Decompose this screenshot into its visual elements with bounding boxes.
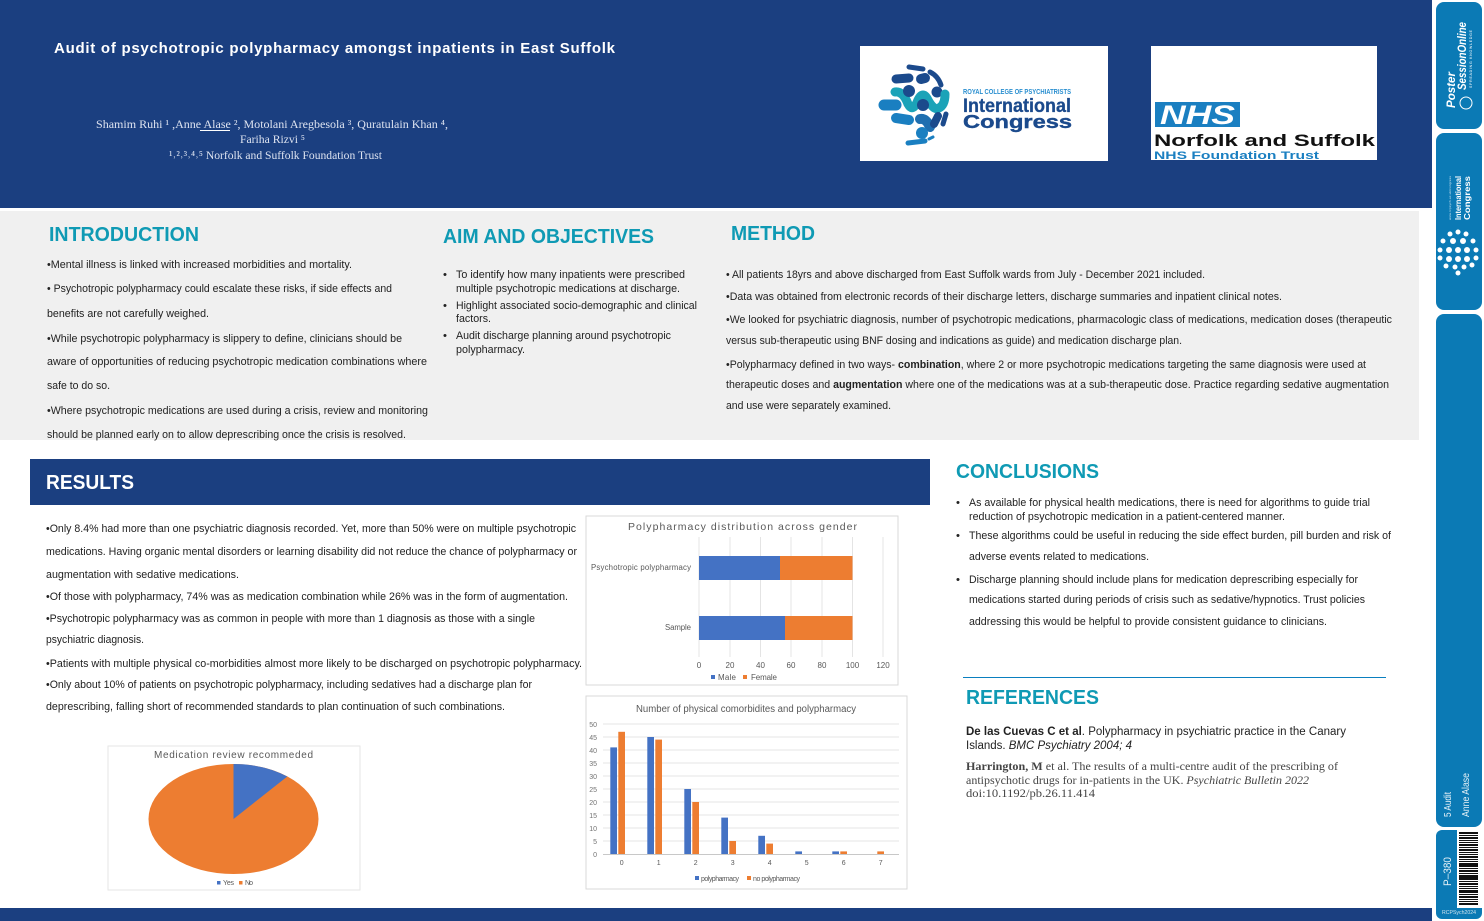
text: objectives: multiple psychotropic medications at discharge. [456,283,680,295]
reference 2: Harrington, M et al. The results of a multi-centre audit of the prescribing of [966,761,1338,773]
text: results: medications. Having organic mental disorders or learning disability did not reduce the chance of polypharmacy or [46,546,577,558]
legend: Male [718,673,737,682]
logo text: Congress [963,111,1072,132]
category labels: Sample [665,623,691,632]
chart title: Number of physical comorbidites and polypharmacy [636,704,856,715]
authors [96,119,448,162]
legend [711,673,778,682]
logo: NHS Norfolk and Suffolk [1151,46,1377,162]
text: method: versus sub-therapeutic using BNF dosing and indications as guide) and medication discharge plan. [726,335,1182,347]
x axis labels: 0 [620,860,624,867]
category labels: Psychotropic polypharmacy [591,563,691,572]
text: conclusions: Discharge planning should include plans for medication deprescribing especially for [969,574,1358,586]
legend: polypharmacy [701,876,740,883]
trust name: Norfolk and Suffolk [1154,131,1376,150]
text: results: psychiatric diagnosis. [46,634,144,646]
legend: No [245,880,253,887]
axis ticks: 100 [846,661,860,670]
axis ticks: 60 [787,661,796,670]
text: introduction: •Where psychotropic medications are used during a crisis, review and monitoring [47,405,428,417]
authors: Shamim Ruhi ¹ ,Anne Alase ², Motolani Aregbesola ³, Quratulain Khan ⁴, [96,119,448,131]
panel: method [726,223,1392,412]
x axis labels: 1 [657,860,661,867]
y axis labels: 45 [589,735,597,742]
text: method: and use were separately examined. [726,400,891,412]
bar: psychotropic polypharmacy [699,556,852,580]
text: method: therapeutic doses and augmentation where one of the medications was at a sub-therapeutic dose. Practice regarding sedative augmentation [726,379,1389,391]
logo text: ROYAL COLLEGE OF PSYCHIATRISTS [963,87,1071,96]
axis ticks: 20 [726,661,735,670]
reference 1: De las Cuevas C et al. Polypharmacy in psychiatric practice in the Canary [966,726,1346,738]
heading bar: results: RESULTS [46,472,134,494]
text: objectives: Audit discharge planning around psychotropic [456,330,671,342]
tab: Poster Session Online: Poster [1444,71,1458,108]
text: objectives: factors. [456,313,491,325]
text: objectives: Highlight associated socio-demographic and clinical [456,300,697,312]
x axis labels: 3 [731,860,735,867]
panel: grey upper section [0,211,1419,441]
text: conclusions: • [956,574,960,586]
text: conclusions: reduction of psychotropic medication in a patient-centered manner. [969,511,1285,523]
text: objectives [443,269,697,356]
heading: references: REFERENCES [966,687,1099,709]
tab: Poster Session Online [1436,2,1482,129]
text: results: •Only 8.4% had more than one psychiatric diagnosis recorded. Yet, more than 50% were on multiple psychotropic [46,523,576,535]
reference 2 [966,761,1338,800]
y axis labels: 15 [589,813,597,820]
chart title: Medication review recommeded [154,750,313,761]
text: conclusions: • [956,530,960,542]
y axis labels: 10 [589,826,597,833]
text: conclusions [956,497,1392,628]
y axis labels: 30 [589,774,597,781]
axis ticks: 0 [697,661,702,670]
y axis labels [589,722,597,859]
tab: poster number and barcode [1436,830,1482,919]
text: results: deprescribing, falling short of recommended standards to plan continuation of such combinations. [46,701,505,713]
NHS lozenge: NHS [1160,100,1235,130]
tab: poster category and author: 5 Audit [1442,792,1454,817]
text: method: • All patients 18yrs and above discharged from East Suffolk wards from July - December 2021 included. [726,269,1205,281]
text: introduction: •Mental illness is linked with increased morbidities and mortality. [47,259,352,271]
tab: poster number and barcode: P–380 [1442,857,1454,886]
text: results: •Patients with multiple physical co-morbidities almost more likely to be discharged on psychotropic polypharmacy. [46,658,582,670]
bar: sample [699,616,852,640]
legend [217,880,253,887]
text: introduction: benefits are not carefully weighed. [47,308,209,320]
logo text [963,87,1072,132]
text: conclusions: addressing this would be helpful to provide consistent guidance to clinicians. [969,616,1327,628]
bars: no polypharmacy [618,732,884,854]
tab: Poster Session Online: SPREADING KNOWLEDGE [1469,29,1473,88]
x axis labels: 7 [879,860,883,867]
y axis labels: 0 [593,852,597,859]
sidebar [1436,2,1482,919]
chart: physical comorbidities and polypharmacy [586,696,907,889]
icon: dotted globe [1438,230,1478,276]
barcode [1457,830,1482,908]
y axis labels: 5 [593,839,597,846]
text: method: •We looked for psychiatric diagnosis, number of psychotropic medications, pharmacologic class of medications, medication doses (therapeutic [726,314,1392,326]
authors: Fariha Rizvi ⁵ [240,134,305,146]
chart title: Polypharmacy distribution across gender [628,521,858,533]
tab: poster category and author [1436,314,1482,827]
reference 2: antipsychotic drugs for in-patients in the UK. Psychiatric Bulletin 2022 [966,775,1309,787]
category labels [591,563,691,632]
y axis labels: 25 [589,787,597,794]
NHS lozenge [1155,100,1240,130]
text: method: •Polypharmacy defined in two ways- combination, where 2 or more psychotropic medications targeting the same diagnosis were used at [726,359,1367,371]
logo: RCPsych International Congress [860,46,1108,161]
text: objectives: polypharmacy. [456,344,525,356]
legend: Yes [223,880,234,887]
text: method: •Data was obtained from electronic records of their discharge letters, discharge summaries and inpatient clinical notes. [726,291,1282,303]
authors: ¹˒²˒³˒⁴˒⁵ Norfolk and Suffolk Foundation Trust [169,150,383,162]
heading: aim and objectives: AIM AND OBJECTIVES [443,226,654,248]
text: conclusions: medications started during periods of crisis such as sedative/hypnotics. Trust policies [969,594,1365,606]
reference 1 [966,726,1346,752]
heading: method: METHOD [731,223,815,245]
text: introduction: should be planned early on to allow deprescribing once the crisis is resolved. [47,429,406,441]
text: conclusions: • [956,497,960,509]
text: objectives: • [443,269,447,281]
text: conclusions: As available for physical health medications, there is need for algorithms to guide trial [969,497,1370,509]
y axis labels: 40 [589,748,597,755]
panel: introduction [47,224,428,441]
pie [148,764,318,874]
axis ticks: 40 [756,661,765,670]
panel: results [30,459,930,890]
heading: introduction: INTRODUCTION [49,224,199,246]
trust subtitle: NHS Foundation Trust [1154,150,1319,162]
text: objectives: To identify how many inpatients were prescribed [456,269,685,281]
text: objectives: • [443,330,447,342]
panel: conclusions [956,461,1392,628]
reference 2: doi:10.1192/pb.26.11.414 [966,788,1095,800]
legend: no polypharmacy [753,876,800,883]
y axis labels: 50 [589,722,597,729]
x axis labels: 6 [842,860,846,867]
text: introduction [47,259,428,441]
legend [695,876,800,883]
reference 1: Islands. BMC Psychiatry 2004; 4 [966,740,1132,752]
text: method [726,269,1392,412]
axis ticks: 80 [818,661,827,670]
x axis labels [620,860,883,867]
text: objectives: • [443,300,447,312]
text: conclusions: adverse events related to medications. [969,551,1149,563]
panel: aim and objectives [443,226,697,356]
text: results [46,523,582,713]
chart: medication review recommended [108,746,360,890]
tab: International Congress: Congress [1462,176,1472,220]
text: introduction: aware of opportunities of reducing psychotropic medication combinations where [47,356,427,368]
tab: International Congress [1436,133,1482,310]
panel: references [966,687,1346,800]
x axis labels: 5 [805,860,809,867]
title: Audit of psychotropic polypharmacy amongst inpatients in East Suffolk [54,40,616,57]
x axis labels: 2 [694,860,698,867]
chart: polypharmacy distribution across gender [586,516,898,685]
axis ticks: 120 [876,661,890,670]
bars: polypharmacy [610,737,839,854]
text: results: •Psychotropic polypharmacy was as common in people with more than 1 diagnosis as those with a single [46,613,535,625]
icon: brain globe [884,67,946,143]
text: results: •Of those with polypharmacy, 74% was as medication combination while 26% was in the form of augmentation. [46,591,568,603]
legend: Female [751,673,778,682]
tab: International Congress: www.rcpsych.ac.uk/congress [1448,176,1452,220]
text: introduction: •While psychotropic polypharmacy is slippery to define, clinicians should be [47,333,402,345]
header band [0,0,1432,208]
y axis labels: 35 [589,761,597,768]
text: introduction: safe to do so. [47,380,110,392]
footer band [0,908,1432,921]
text: conclusions: These algorithms could be useful in reducing the side effect burden, pill burden and risk of [969,530,1392,542]
tab: Poster Session Online: SessionOnline [1455,22,1469,90]
axis ticks [697,661,890,670]
text: results: augmentation with sedative medications. [46,569,239,581]
tab: poster category and author: Anne Alase [1460,773,1472,817]
text: introduction: • Psychotropic polypharmacy could escalate these risks, if side effects and [47,283,392,295]
text: results: •Only about 10% of patients on psychotropic polypharmacy, including sedatives had a discharge plan for [46,679,532,691]
heading: conclusions: CONCLUSIONS [956,461,1099,483]
tab: International Congress: International [1453,176,1463,220]
x axis labels: 4 [768,860,772,867]
y axis labels: 20 [589,800,597,807]
heading bar: results [30,459,930,505]
tab: poster number and barcode: RCPSych2024 [1442,910,1476,916]
logo text: International [963,96,1071,117]
